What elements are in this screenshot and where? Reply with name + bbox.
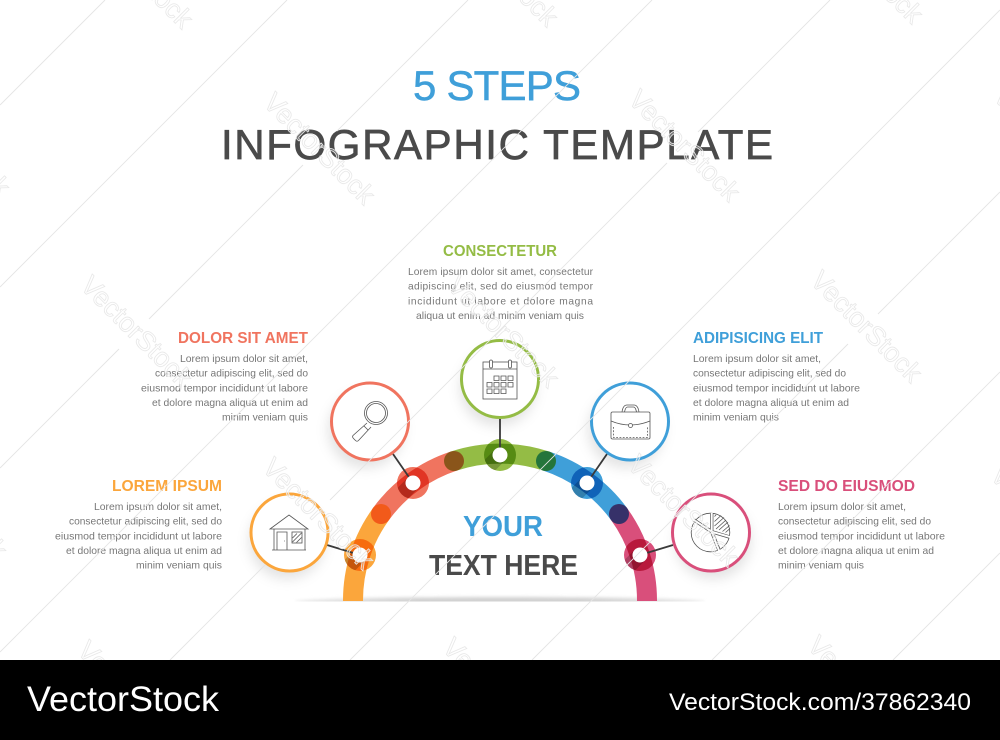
step 1 text — [55, 478, 222, 572]
step markers — [344, 439, 656, 571]
step 5 text: consectetur adipiscing elit, sed do — [778, 517, 931, 528]
step 2 circle: magnifier icon — [332, 383, 408, 460]
step 5 text — [778, 478, 945, 572]
step 3 text — [408, 243, 594, 322]
title: 5 STEPS — [413, 62, 581, 109]
step 2 text: consectetur adipiscing elit, sed do — [155, 369, 308, 380]
watermark: VectorStock — [623, 84, 746, 207]
footer bar: VectorStock.com/37862340 — [669, 689, 971, 716]
watermark: VectorStock — [257, 452, 380, 575]
center text — [429, 511, 578, 582]
step 2 text: minim veniam quis — [222, 413, 308, 424]
center text: TEXT HERE — [429, 550, 578, 582]
step 3 text: adipiscing elit, sed do eiusmod tempor — [408, 282, 594, 293]
step 4 text: eiusmod tempor incididunt ut labore — [693, 383, 860, 394]
step 1 text: consectetur adipiscing elit, sed do — [69, 517, 222, 528]
watermark: VectorStock — [75, 270, 198, 393]
step 3 text: CONSECTETUR — [443, 243, 557, 260]
step 5 text: Lorem ipsum dolor sit amet, — [778, 502, 906, 513]
step 4 text — [693, 330, 860, 424]
step 4 text: minim veniam quis — [693, 413, 779, 424]
step 3 text: aliqua ut enim ad minim veniam quis — [416, 311, 584, 322]
watermark: VectorStock — [258, 87, 381, 210]
step 1 circle: house icon — [251, 494, 328, 571]
watermark: VectorStock — [805, 265, 928, 388]
step 2 text: eiusmod tempor incididunt ut labore — [141, 383, 308, 394]
step 4 text: Lorem ipsum dolor sit amet, — [693, 354, 821, 365]
ground shadow — [298, 596, 702, 602]
step 5 text: minim veniam quis — [778, 561, 864, 572]
step 1 text: minim veniam quis — [136, 561, 222, 572]
step 1 text: LOREM IPSUM — [112, 478, 222, 495]
watermark: VectorStock — [442, 270, 565, 393]
step 4 text: ADIPISICING ELIT — [693, 330, 824, 347]
step 4 text: consectetur adipiscing elit, sed do — [693, 369, 846, 380]
step 3 text: Lorem ipsum dolor sit amet, consectetur — [408, 267, 594, 278]
arc junction dots — [371, 451, 629, 524]
step 4 circle: briefcase icon — [592, 383, 668, 460]
step 1 text: Lorem ipsum dolor sit amet, — [94, 502, 222, 513]
footer bar: VectorStock — [27, 680, 220, 719]
watermark: VectorStock — [622, 449, 745, 572]
step 5 text: et dolore magna aliqua ut enim ad — [778, 546, 934, 557]
arc chart — [327, 418, 673, 601]
step 3 circle: calendar icon — [462, 340, 538, 418]
step 1 text: eiusmod tempor incididunt ut labore — [55, 531, 222, 542]
step 5 circle: pie chart icon — [672, 494, 750, 571]
circle shadows — [249, 350, 751, 579]
footer bar — [0, 660, 1000, 740]
title — [221, 62, 773, 168]
center text: YOUR — [463, 511, 543, 543]
step 2 text — [141, 330, 309, 424]
step 5 text: SED DO EIUSMOD — [778, 478, 915, 495]
step 2 text: et dolore magna aliqua ut enim ad — [152, 398, 308, 409]
step 2 text: Lorem ipsum dolor sit amet, — [180, 354, 308, 365]
step 1 text: et dolore magna aliqua ut enim ad — [66, 546, 222, 557]
step 3 text: incididunt ut labore et dolore magna — [408, 296, 593, 307]
step 2 text: DOLOR SIT AMET — [178, 330, 309, 347]
connectors — [327, 418, 673, 555]
step 4 text: et dolore magna aliqua ut enim ad — [693, 398, 849, 409]
step 5 text: eiusmod tempor incididunt ut labore — [778, 531, 945, 542]
title: INFOGRAPHIC TEMPLATE — [221, 121, 773, 168]
